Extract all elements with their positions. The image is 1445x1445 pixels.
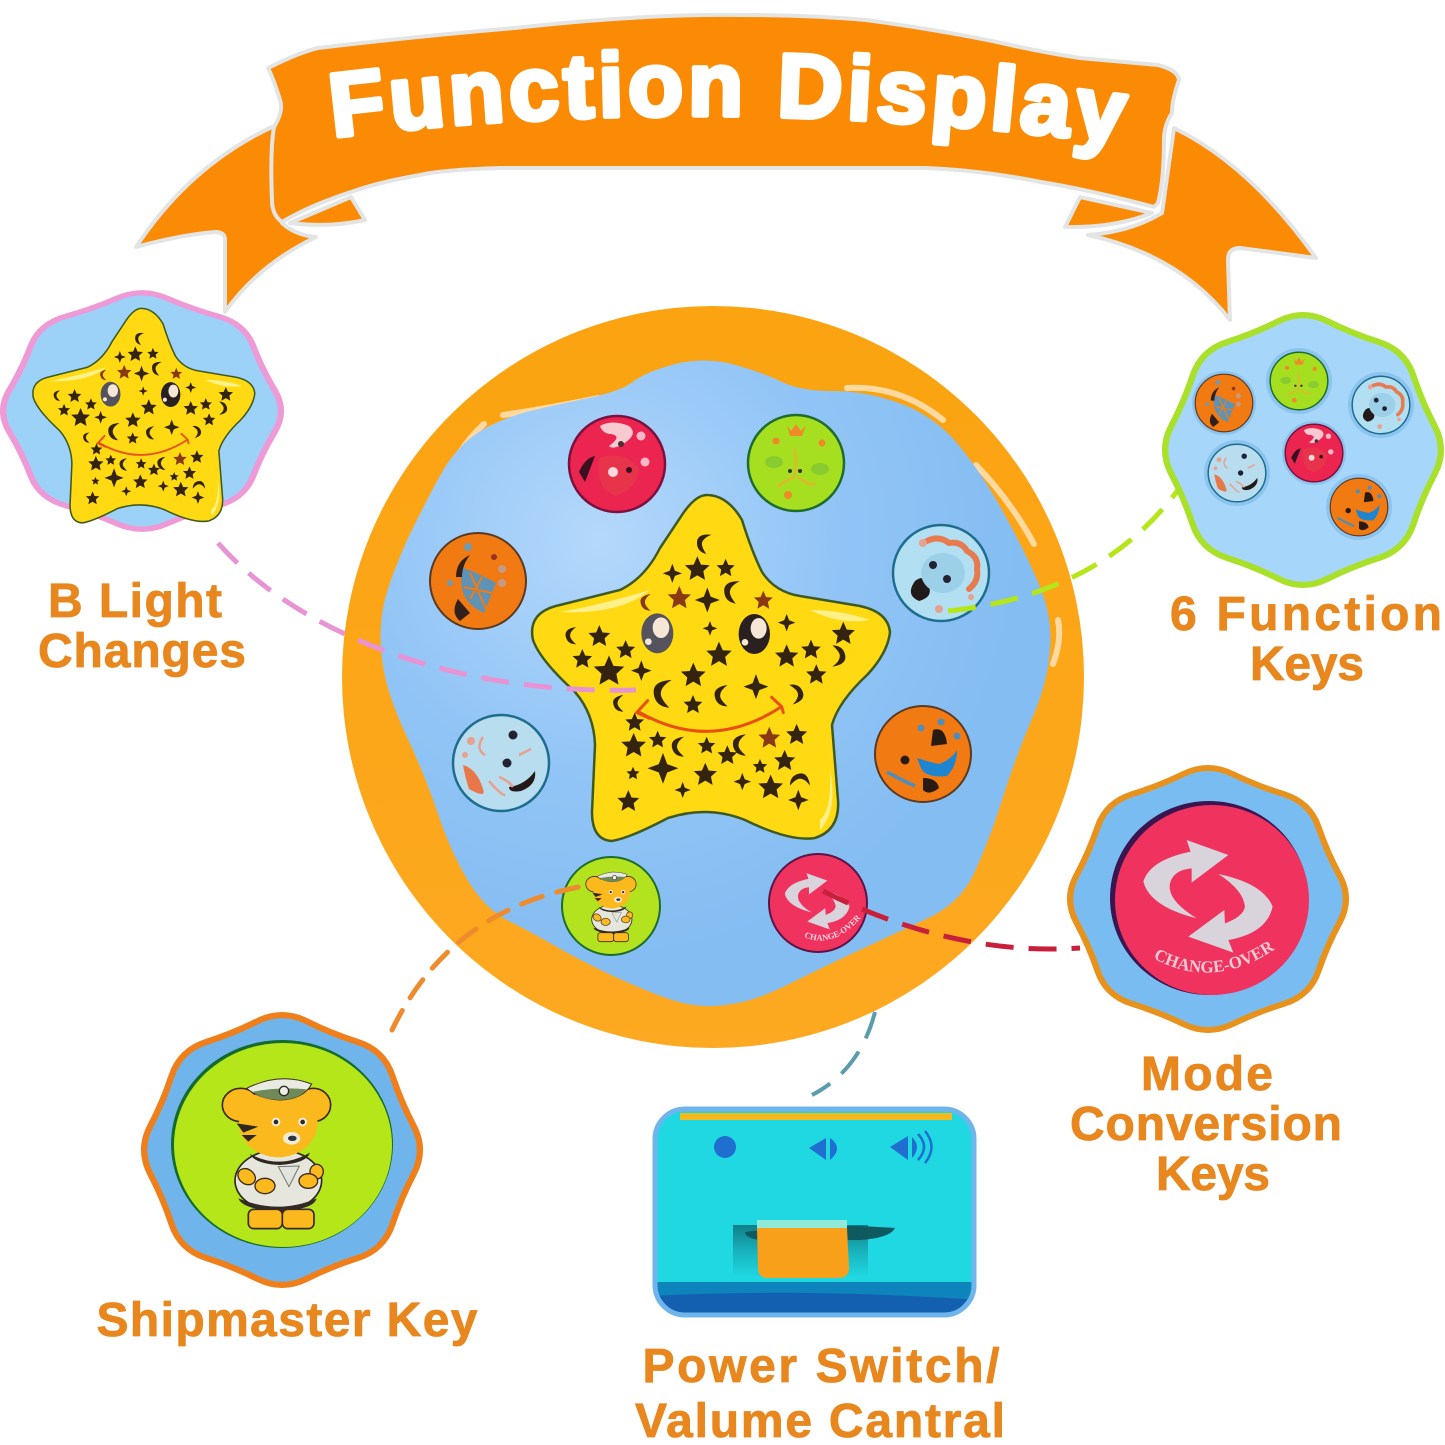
- dashed connector: green: [948, 490, 1178, 611]
- banner: right tail: [1065, 128, 1316, 320]
- banner: main ribbon: [268, 15, 1179, 222]
- banner: left tail: [136, 126, 365, 312]
- callout: star light: [3, 293, 281, 529]
- label: Mode Conversion Keys: [1070, 1048, 1342, 1201]
- dashed connector: teal: [812, 1012, 875, 1095]
- icon: low volume: [809, 1138, 837, 1160]
- dashed connector: pink: [218, 543, 636, 690]
- label: B Light Changes: B Light: [48, 575, 222, 628]
- callout: change-over button: CHANGE-OVER: [1155, 942, 1276, 973]
- callout: shipmaster button: [144, 1015, 420, 1285]
- button: light blue right: [893, 525, 989, 621]
- central star: [532, 495, 890, 841]
- dashed connector: red: [823, 891, 1080, 949]
- button: orange whale: [875, 706, 971, 802]
- label: 6 Function Keys: 6 Function: [1170, 588, 1442, 641]
- button: shipmaster tiger: [562, 857, 660, 955]
- title: Function Display: [329, 48, 1130, 160]
- callout: change-over button: [1066, 765, 1350, 1033]
- main toy disc: [342, 306, 1084, 1048]
- callout: six function keys: [1165, 315, 1441, 585]
- button: change-over: CHANGE-OVER: [805, 916, 861, 941]
- button: green face: [748, 415, 844, 511]
- callout: power switch panel: [650, 1109, 980, 1320]
- button: light blue left: [453, 715, 549, 811]
- label: 6 Function Keys: [1170, 588, 1442, 691]
- button: orange fish: [430, 533, 526, 629]
- icon: volume waves: [918, 1131, 932, 1163]
- blue scalloped top of toy: [380, 360, 1050, 1006]
- label: Mode Conversion Keys: Keys: [1156, 1148, 1270, 1201]
- icon: off dot: [714, 1136, 736, 1158]
- label: B Light Changes: [38, 575, 246, 678]
- label: Mode Conversion Keys: Mode: [1141, 1048, 1273, 1101]
- button: red face: [569, 416, 665, 512]
- label: Power Switch / Valume Cantral: [635, 1340, 1005, 1445]
- label: Shipmaster Key: Shipmaster Key: [96, 1294, 478, 1347]
- icon: high volume: [890, 1136, 917, 1160]
- label: B Light Changes: Changes: [38, 625, 246, 678]
- label: Mode Conversion Keys: Conversion: [1070, 1098, 1342, 1151]
- button: change-over: [768, 853, 868, 953]
- label: 6 Function Keys: Keys: [1250, 638, 1364, 691]
- label: Power Switch / Valume Cantral: Power Switch/: [642, 1340, 1000, 1393]
- dashed connector: orange: [392, 886, 584, 1030]
